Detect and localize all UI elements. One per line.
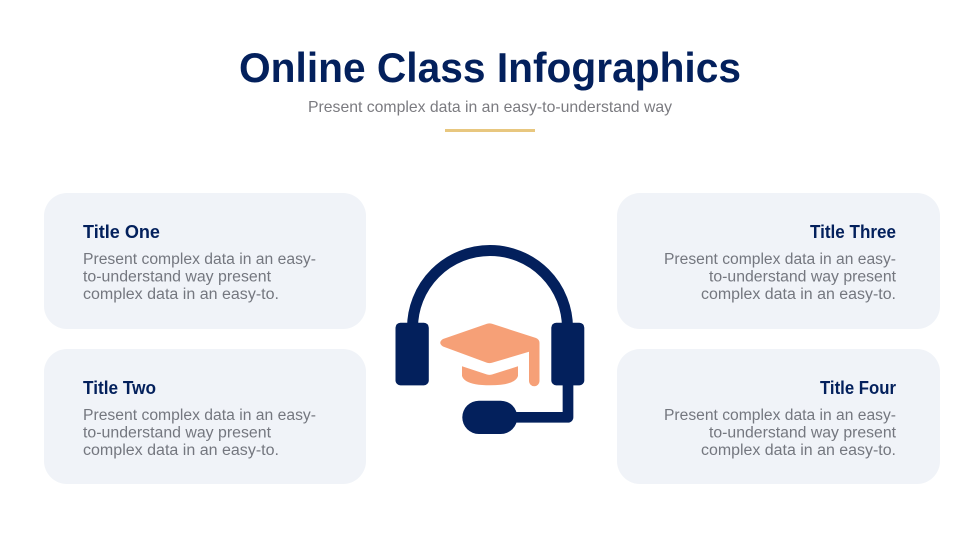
accent underline	[445, 129, 535, 132]
panel: title two: to-understand way present	[83, 424, 272, 442]
panel: title one: Title One	[83, 221, 160, 242]
panel: title four: complex data in an easy-to.	[701, 442, 896, 459]
panel: title two: Present complex data in an easy-	[83, 407, 316, 424]
icon: headset with graduation cap	[396, 250, 584, 434]
panel: title four: Present complex data in an easy-	[664, 407, 896, 424]
panel: title one	[44, 193, 366, 329]
panel: title four: Title Four	[820, 377, 896, 398]
panel: title three: Present complex data in an easy-	[664, 251, 896, 268]
panel: title one: Present complex data in an easy-	[83, 251, 316, 268]
panel: title two	[44, 349, 366, 484]
subtitle: Present complex data in an easy-to-understand way	[308, 99, 672, 116]
panel: title four	[617, 349, 940, 484]
panel: title three: Title Three	[810, 221, 896, 242]
panel: title three: complex data in an easy-to.	[701, 286, 896, 303]
title: Online Class Infographics	[239, 44, 741, 91]
panel: title one: to-understand way present	[83, 268, 272, 286]
panel: title two: complex data in an easy-to.	[83, 442, 279, 459]
panel: title three	[617, 193, 940, 329]
panel: title two: Title Two	[83, 377, 156, 398]
panel: title one: complex data in an easy-to.	[83, 286, 279, 303]
panel: title four: to-understand way present	[709, 424, 897, 442]
panel: title three: to-understand way present	[709, 268, 897, 286]
